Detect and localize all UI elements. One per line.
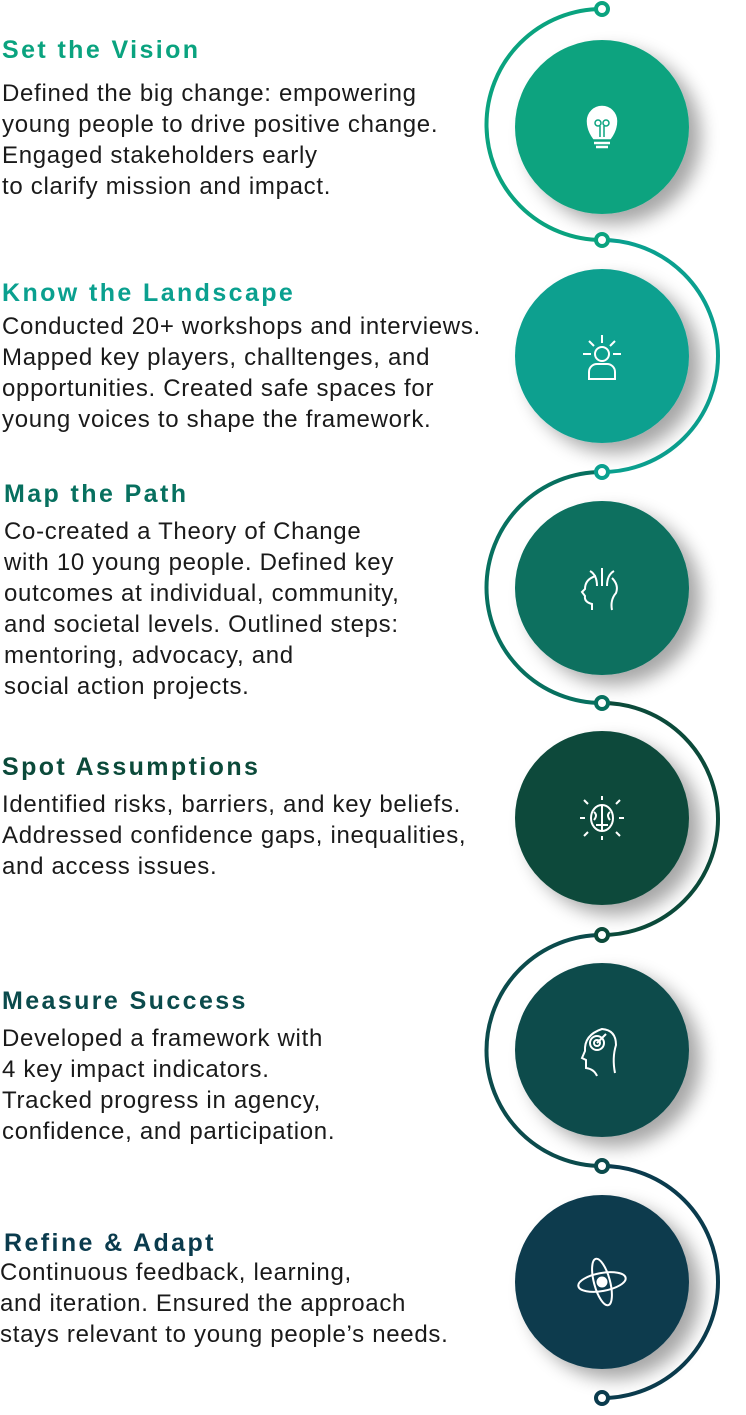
section 5: Measure Success: Tracked progress in agency, (2, 1087, 321, 1114)
section 6: Refine & Adapt: and iteration. Ensured the approach (0, 1290, 406, 1317)
section 5: Measure Success (2, 987, 335, 1145)
section 4: Spot Assumptions: Spot Assumptions (2, 753, 260, 781)
section 4: Spot Assumptions: Addressed confidence gaps, inequalities, (2, 822, 466, 849)
section 4: Spot Assumptions (2, 753, 466, 880)
circle 6: atom (515, 1195, 689, 1369)
section 2: Know the Landscape: young voices to shape the framework. (2, 406, 431, 433)
section 1: Set the Vision: Defined the big change: empowering (2, 80, 417, 107)
section 3: Map the Path: mentoring, advocacy, and (4, 642, 294, 669)
circle 4: brain (515, 731, 689, 905)
section 3: Map the Path: Co-created a Theory of Change (4, 518, 361, 545)
circle 1: lightbulb (515, 40, 689, 214)
section 2: Know the Landscape: Know the Landscape (2, 279, 295, 307)
section 2: Know the Landscape (2, 279, 481, 433)
section 3: Map the Path: and societal levels. Outlined steps: (4, 611, 399, 638)
circle 3: head with arrows (515, 501, 689, 675)
section 5: Measure Success: Developed a framework with (2, 1025, 323, 1052)
section 3: Map the Path: with 10 young people. Defined key (4, 549, 394, 576)
section 1: Set the Vision: young people to drive positive change. (2, 111, 438, 138)
section 6: Refine & Adapt (0, 1229, 448, 1348)
section 1: Set the Vision: to clarify mission and impact. (2, 173, 331, 200)
section 2: Know the Landscape: Conducted 20+ workshops and interviews. (2, 313, 481, 340)
section 2: Know the Landscape: Mapped key players, challtenges, and (2, 344, 430, 371)
section 3: Map the Path (4, 480, 400, 700)
section 5: Measure Success: Measure Success (2, 987, 248, 1015)
section 6: Refine & Adapt: Continuous feedback, learning, (0, 1259, 352, 1286)
section 6: Refine & Adapt: Refine & Adapt (4, 1229, 216, 1257)
section 3: Map the Path: Map the Path (4, 480, 188, 508)
section 1: Set the Vision (2, 36, 438, 200)
section 1: Set the Vision: Set the Vision (2, 36, 200, 64)
section 4: Spot Assumptions: and access issues. (2, 853, 217, 880)
section 6: Refine & Adapt: stays relevant to young people’s needs. (0, 1321, 448, 1348)
section 5: Measure Success: 4 key impact indicators. (2, 1056, 270, 1083)
circle 5: head with target (515, 963, 689, 1137)
circle 2: person with arrows (515, 269, 689, 443)
section 3: Map the Path: social action projects. (4, 673, 250, 700)
connector nodes (596, 3, 608, 1404)
section 5: Measure Success: confidence, and participation. (2, 1118, 335, 1145)
section 1: Set the Vision: Engaged stakeholders early (2, 142, 318, 169)
section 3: Map the Path: outcomes at individual, community, (4, 580, 400, 607)
section 4: Spot Assumptions: Identified risks, barriers, and key beliefs. (2, 791, 461, 818)
section 2: Know the Landscape: opportunities. Created safe spaces for (2, 375, 434, 402)
